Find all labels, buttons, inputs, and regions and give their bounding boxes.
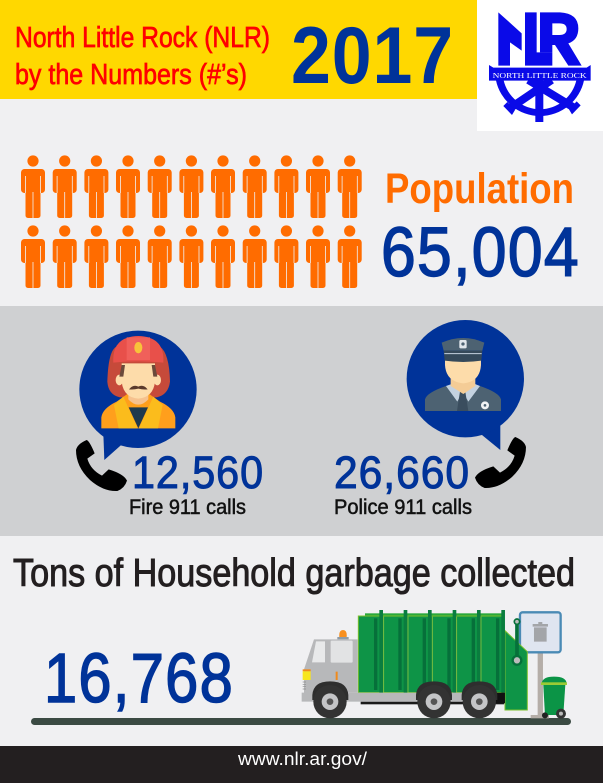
icon: fire phone: [76, 440, 127, 491]
911 calls panel: [0, 306, 603, 536]
truck: [302, 610, 527, 718]
year: 2017: [291, 11, 454, 101]
footer bar: [0, 746, 603, 783]
icon: firefighter: [101, 336, 175, 428]
police calls number: 26,660: [334, 447, 470, 498]
population people pictogram: [21, 155, 362, 289]
garbage number: 16,768: [44, 639, 234, 717]
police calls label: Police 911 calls: [334, 496, 472, 519]
icon: wheelie bin: [541, 677, 567, 719]
icon: bin sign: [520, 612, 561, 718]
fire calls label: Fire 911 calls: [129, 496, 246, 519]
title: by the Numbers (#’s): [15, 59, 247, 91]
NLR logo: NORTH LITTLE ROCK: [493, 71, 587, 80]
title: North Little Rock (NLR): [15, 22, 270, 54]
logo panel: [477, 0, 603, 131]
fire calls number: 12,560: [132, 447, 264, 498]
fire speech bubble: [79, 331, 197, 460]
population number: 65,004: [381, 213, 580, 291]
icon: police phone: [475, 437, 526, 488]
ground line: [31, 718, 571, 725]
website url: www.nlr.ar.gov/: [237, 749, 367, 769]
title: [15, 22, 270, 91]
icon: police officer: [425, 338, 501, 411]
police speech bubble: [407, 320, 524, 450]
garbage truck scene: [302, 610, 567, 719]
population label: Population: [385, 165, 574, 213]
header banner: [0, 0, 477, 99]
